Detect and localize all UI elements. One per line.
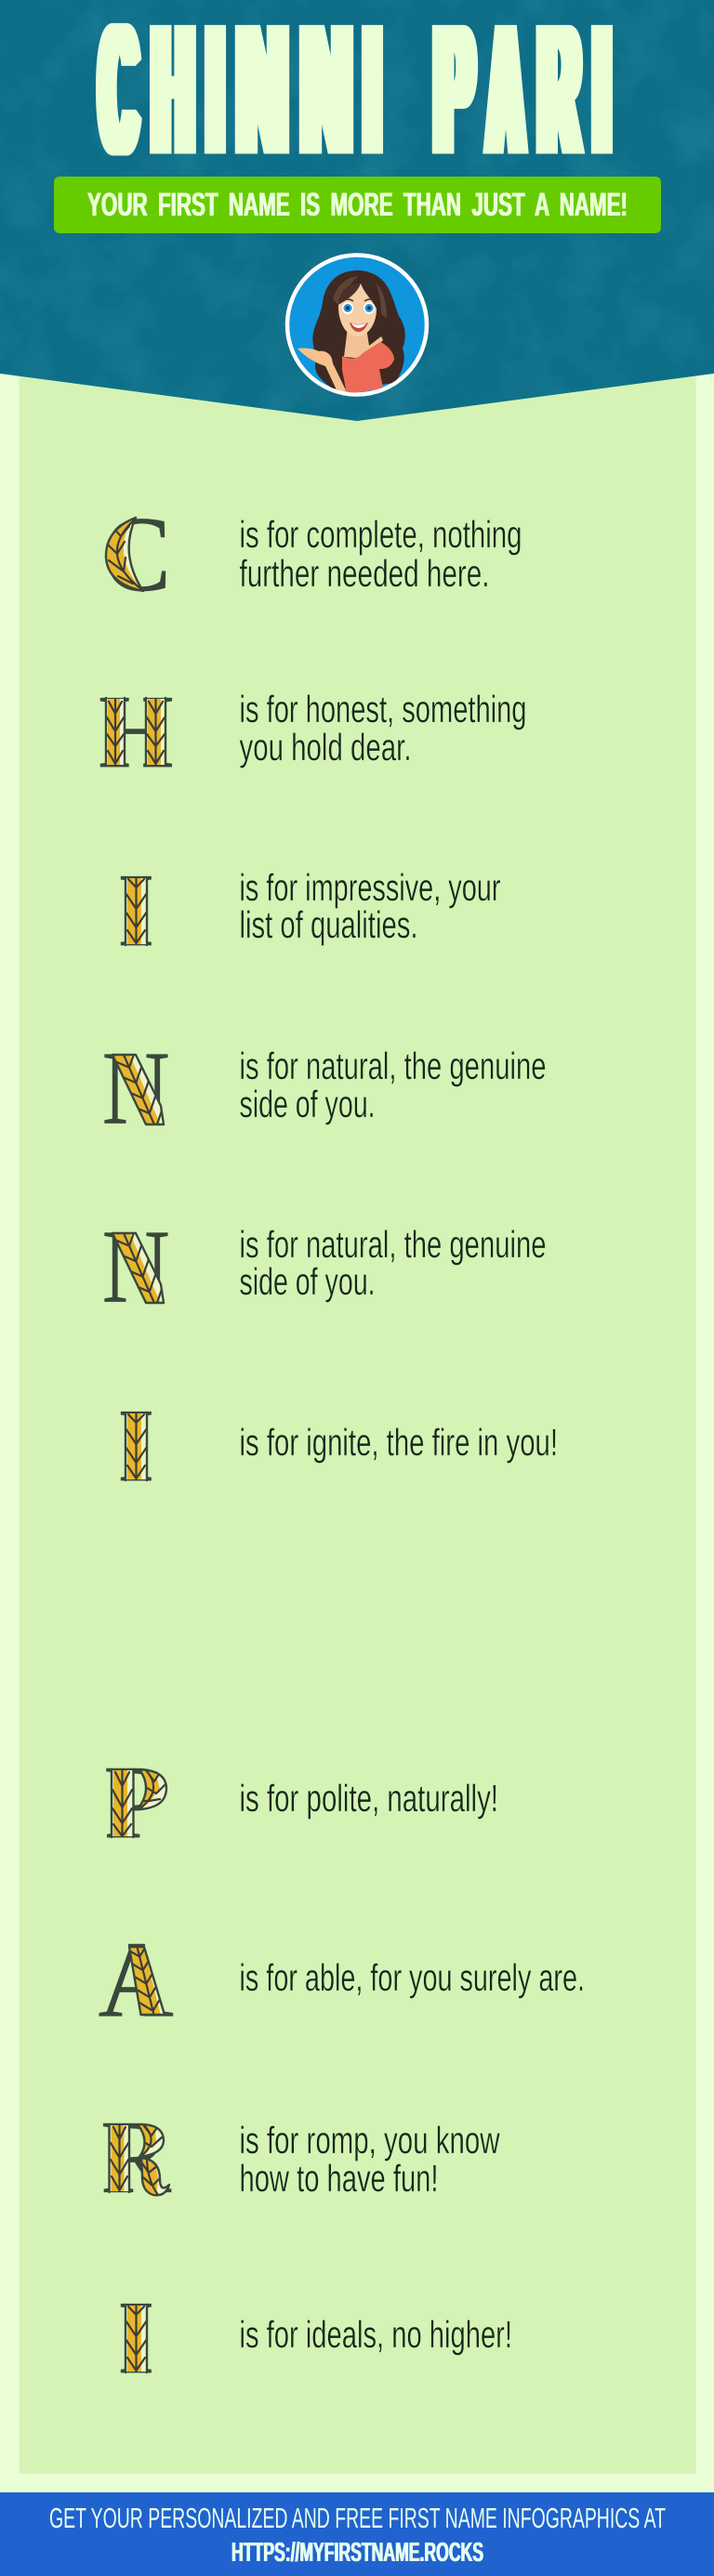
- icon: letter A: [99, 1944, 173, 2017]
- row: C: [104, 517, 521, 593]
- text: I line: [240, 866, 500, 946]
- icon: letter P: P: [103, 1744, 168, 1860]
- text: P line: is for polite, naturally!: [240, 1777, 498, 1820]
- row: I (impressive): [117, 853, 501, 968]
- icon: letter N: N: [102, 1032, 170, 1147]
- icon: letter I: I: [117, 2280, 155, 2396]
- text: N line: side of you.: [240, 1083, 376, 1125]
- icon: letter I: I: [117, 1388, 155, 1504]
- icon: letter H: H: [98, 675, 175, 790]
- panel: letters background: [19, 353, 695, 2474]
- text: I line: is for ideals, no higher!: [240, 2313, 512, 2356]
- row: I (ignite): [117, 1388, 558, 1504]
- text: N line: is for natural, the genuine: [240, 1223, 547, 1266]
- banner: [54, 177, 661, 233]
- icon: letter C: [104, 517, 165, 593]
- row: A: [99, 1944, 582, 2017]
- text: R line: is for romp, you know: [240, 2119, 500, 2162]
- row: P: [106, 1768, 496, 1838]
- icon: letter R: R: [100, 2100, 172, 2215]
- icon: letter R: [102, 2123, 171, 2197]
- icon: letter N: N: [102, 1210, 170, 1325]
- row: N (first): [104, 1052, 545, 1126]
- icon: woman avatar: [287, 255, 427, 394]
- text: C line: is for complete, nothing: [240, 513, 522, 556]
- text: I line: is for impressive, your: [240, 866, 500, 909]
- text: R line: [240, 2119, 500, 2200]
- text: C line: [240, 513, 522, 595]
- icon: letter I: I: [117, 853, 155, 968]
- icon: letter N: [104, 1232, 168, 1305]
- footer url: HTTPS://MYFIRSTNAME.ROCKS: [231, 2538, 483, 2568]
- footer: [0, 2492, 714, 2576]
- text: H line: is for honest, something: [240, 688, 526, 730]
- text: I line: is for ignite, the fire in you!: [240, 1421, 558, 1464]
- text: R line: how to have fun!: [240, 2157, 439, 2200]
- icon: letter N: [104, 1054, 168, 1126]
- header band: [0, 0, 714, 421]
- row: H: [98, 675, 527, 790]
- row: N (second): [104, 1230, 545, 1305]
- icon: letter A: A: [99, 1924, 174, 2039]
- row: I (ideals): [117, 2280, 512, 2396]
- text: N line: is for natural, the genuine: [240, 1045, 547, 1087]
- text: I line: list of qualities.: [240, 903, 418, 946]
- icon: letter C: C: [103, 495, 171, 614]
- text: N line: side of you.: [240, 1260, 376, 1303]
- text: N line: [240, 1223, 547, 1303]
- text: N line: [240, 1045, 547, 1125]
- text: H line: [240, 688, 526, 769]
- text: H line: you hold dear.: [240, 726, 411, 769]
- title: [100, 0, 609, 193]
- text: C line: further needed here.: [240, 552, 489, 595]
- row: R: [102, 2123, 500, 2197]
- icon: letter P: [106, 1768, 167, 1838]
